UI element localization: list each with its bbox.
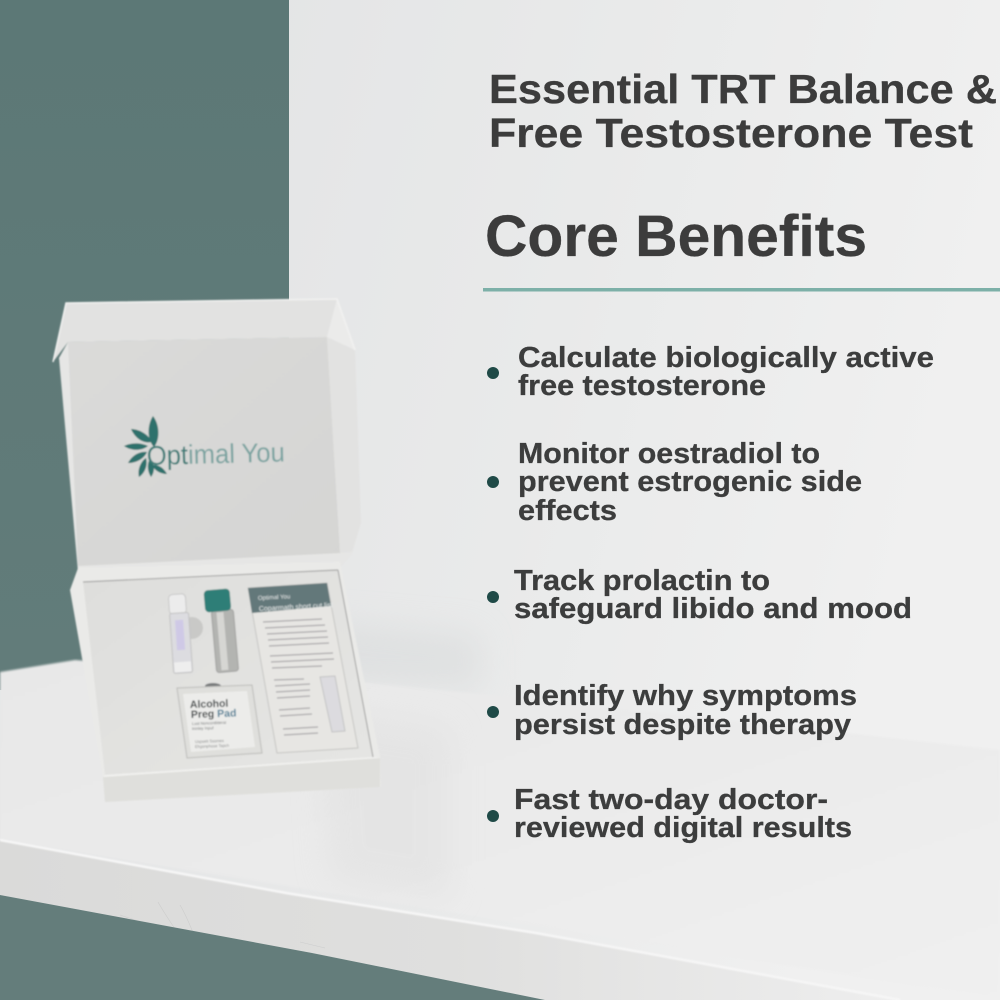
benefit 5: reviewed digital results [514, 812, 852, 844]
benefit 2: prevent estrogenic side [518, 466, 862, 498]
teal floor below table [0, 895, 545, 1000]
benefit 5: Fast two-day doctor- [514, 784, 828, 816]
item: alcohol prep pad: Ininley Inpuf [192, 725, 214, 731]
wall shadow near table [300, 620, 480, 690]
teal wall panel [0, 0, 289, 690]
item: instruction leaflet [248, 583, 358, 753]
benefit 1 [487, 342, 934, 402]
tray cut-out [181, 617, 203, 639]
benefit 3 [487, 565, 912, 625]
item: instruction leaflet: Coparmath short cut list [259, 602, 333, 613]
table surface [0, 660, 1000, 1000]
item: alcohol prep pad: Uspselt Ssomes [195, 738, 224, 744]
item: instruction leaflet: Optimal You [258, 594, 290, 602]
benefit 1: Calculate biologically active [518, 342, 934, 374]
title [489, 66, 997, 156]
benefit 4: persist despite therapy [514, 709, 851, 741]
brand name: Optimal You [146, 437, 285, 471]
box lid [53, 299, 361, 572]
box base [70, 562, 381, 802]
title: Free Testosterone Test [489, 110, 973, 156]
benefit 2: effects [518, 495, 617, 527]
benefit 2: Monitor oestradiol to [518, 438, 820, 470]
item: alcohol prep pad: Ehgonphose Tapch [195, 743, 229, 749]
benefit 3: Track prolactin to [514, 565, 770, 597]
title: Essential TRT Balance & [489, 66, 997, 112]
benefit 5 [487, 784, 852, 844]
item: alcohol prep pad: Alcohol [190, 698, 229, 711]
logo: Optimal You [124, 416, 285, 477]
heading: core benefits: Core Benefits [485, 204, 867, 269]
product kit box [53, 299, 381, 802]
benefit 1: free testosterone [518, 370, 766, 402]
item: alcohol prep pad: Preg Pad [191, 707, 237, 721]
benefit 3: safeguard libido and mood [514, 593, 912, 625]
icon: leaves [124, 416, 167, 477]
item: lancet vial [168, 593, 193, 674]
item: alcohol prep pad [177, 683, 262, 758]
benefit 2 [487, 438, 862, 527]
item: blood tube [203, 588, 239, 673]
benefit 4: Identify why symptoms [514, 680, 857, 712]
table front edge [0, 840, 900, 1000]
benefits list [487, 342, 934, 844]
benefit 4 [487, 680, 857, 741]
item: alcohol prep pad: Lust Noncontlitteral [192, 720, 226, 726]
